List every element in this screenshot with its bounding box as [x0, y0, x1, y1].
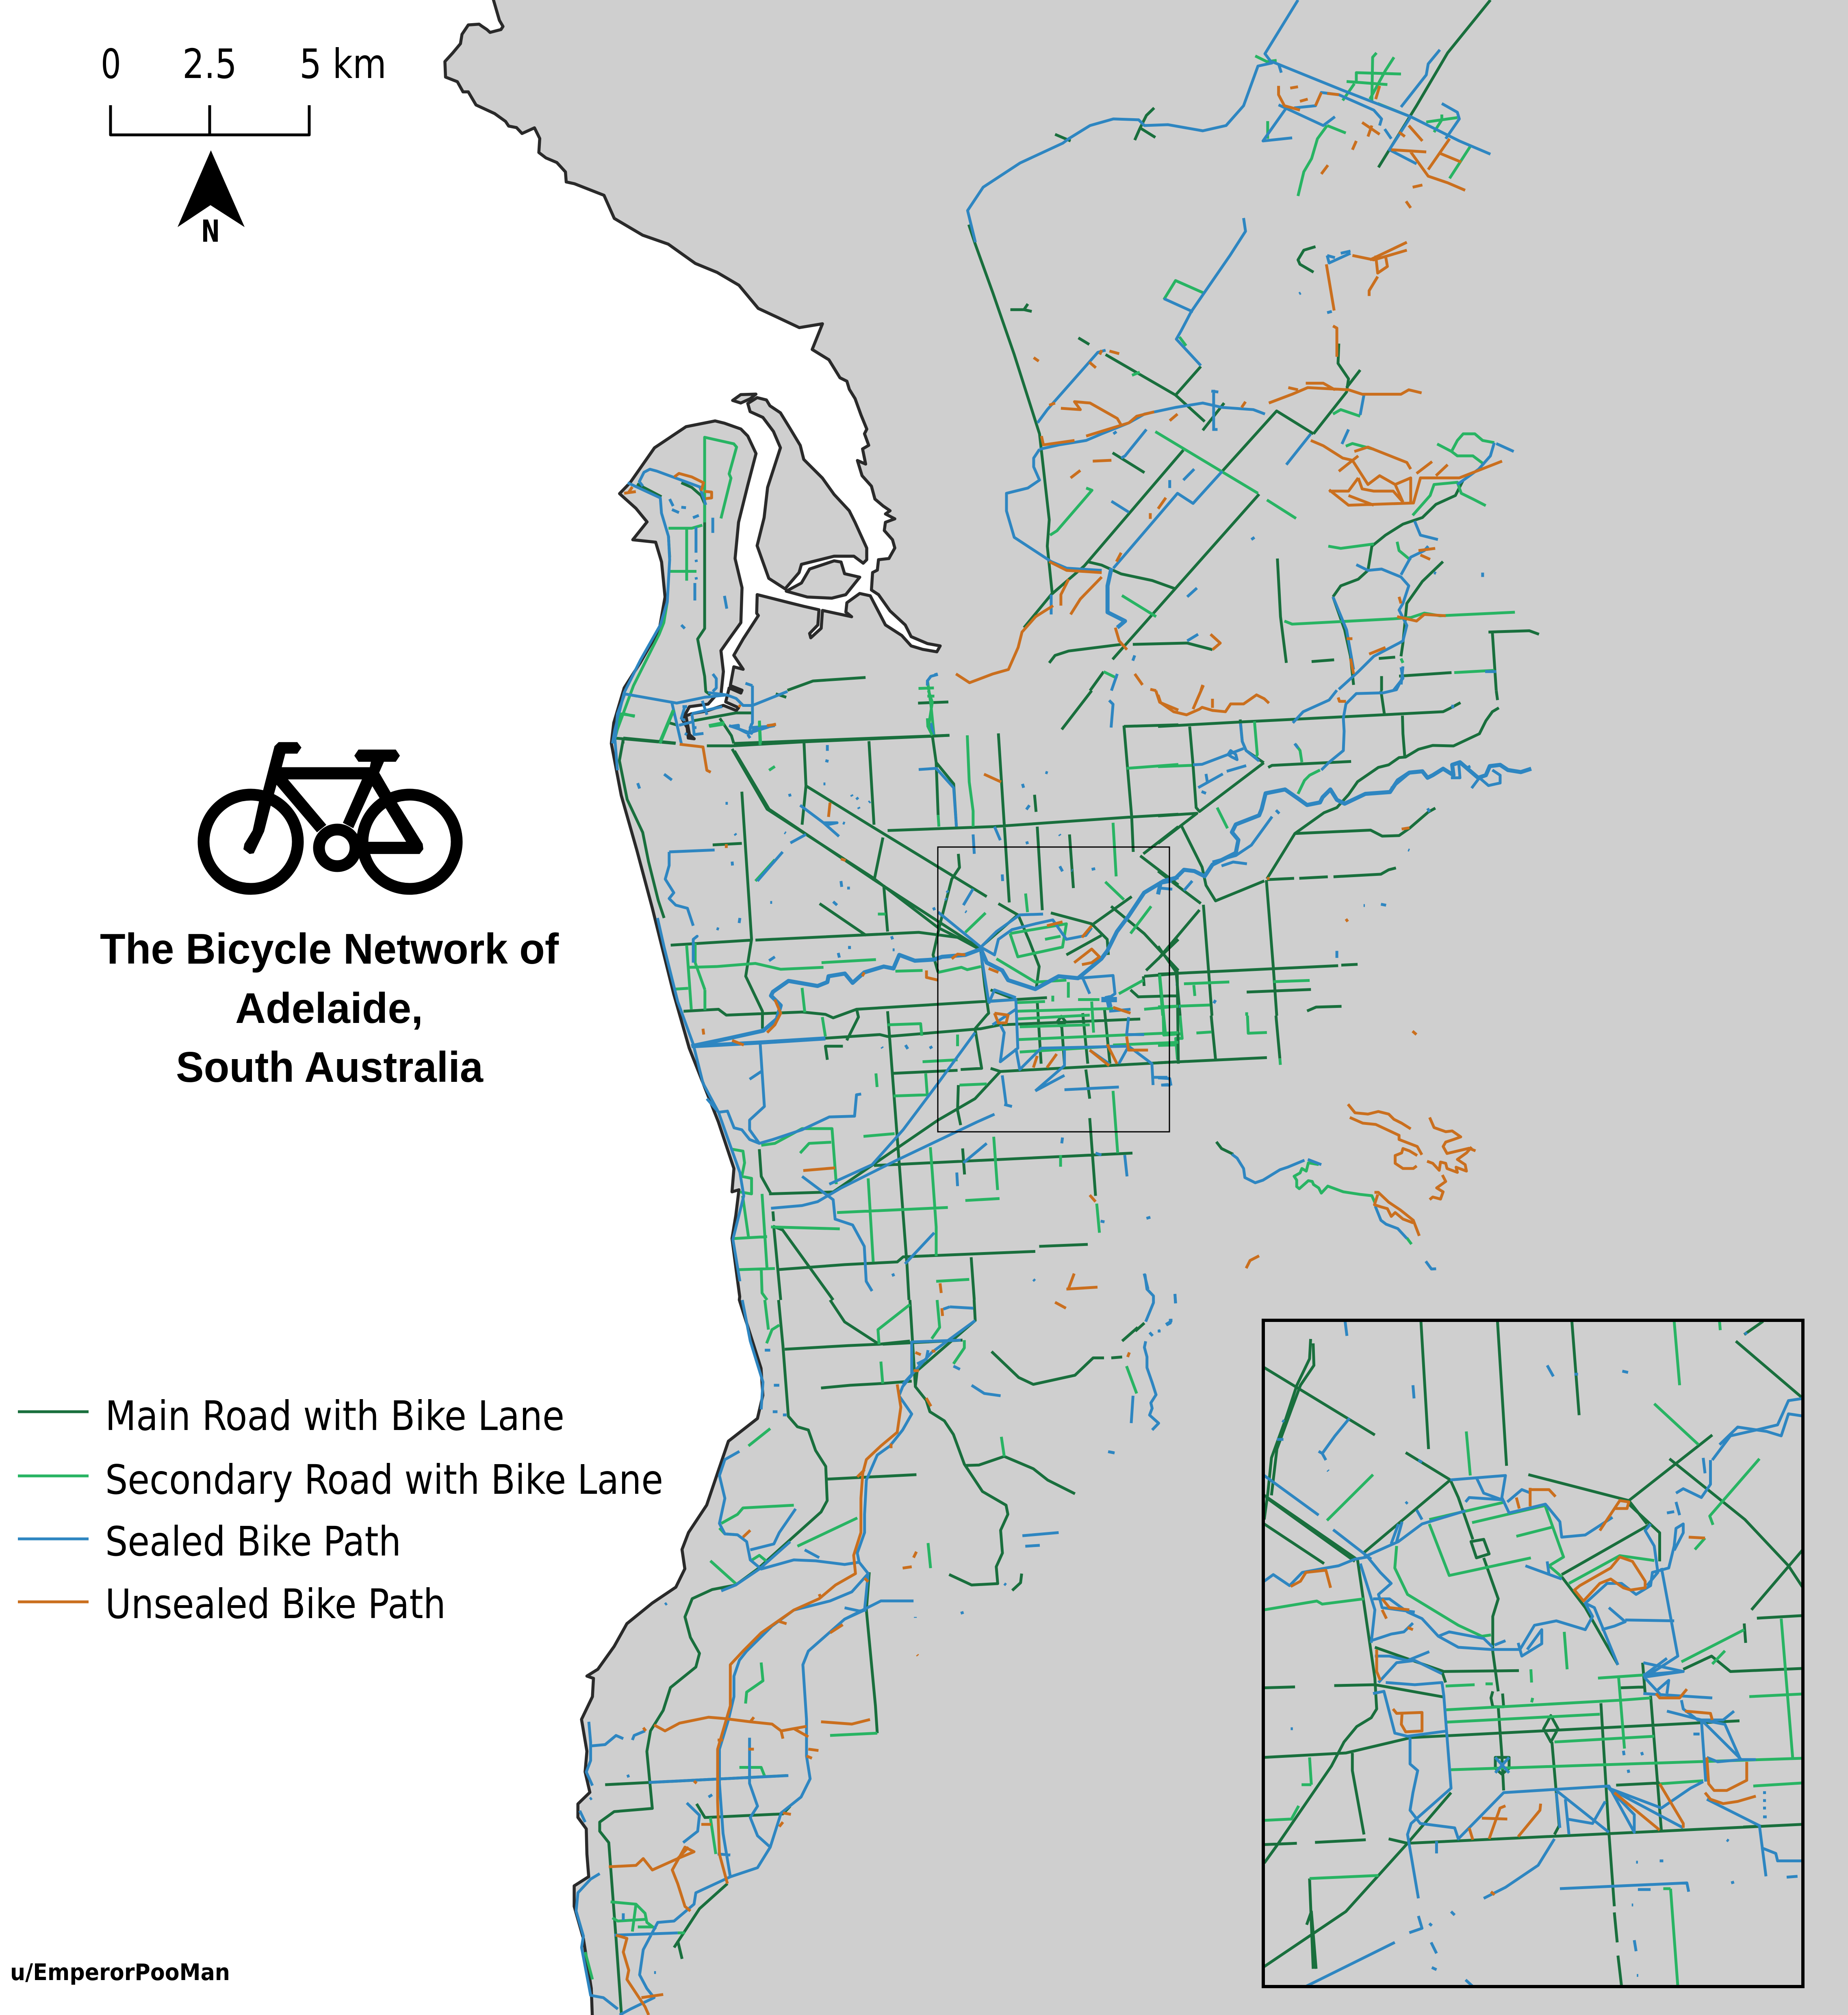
inset network	[1264, 1322, 1803, 1987]
river trail	[1158, 762, 1531, 895]
unsealed paths	[1158, 685, 1410, 922]
bicycle frame	[243, 742, 423, 854]
main roads	[969, 0, 1539, 691]
main road	[1135, 1323, 1144, 1331]
front wheel	[204, 795, 298, 889]
legend: main road: Main Road with Bike Lane	[105, 1392, 564, 1440]
secondary roads	[614, 437, 935, 743]
network tile: south-east foothills	[1158, 1016, 1475, 1331]
unsealed paths	[680, 691, 1178, 1293]
main roads	[600, 1300, 1138, 2015]
bicycle network map	[576, 0, 1539, 2015]
rear wheel	[362, 795, 457, 889]
secondary roads	[1050, 53, 1515, 678]
legend: sealed path: Sealed Bike Path	[105, 1518, 401, 1565]
secondary roads	[1158, 722, 1320, 1016]
unsealed paths	[609, 1302, 1130, 2015]
inset background	[1263, 1320, 1803, 1987]
legend: unsealed path: Unsealed Bike Path	[105, 1580, 446, 1628]
sealed paths	[1158, 1078, 1436, 1331]
network tile: eastern suburbs and river	[1158, 666, 1531, 1016]
main roads	[1158, 691, 1499, 1016]
sealed paths	[612, 469, 938, 743]
author credit: u/EmperorPooMan	[10, 1959, 230, 1986]
network tile: northern suburbs	[935, 0, 1539, 691]
arrow head	[178, 150, 245, 227]
main roads	[619, 691, 1178, 1300]
sealed paths	[1108, 1274, 1176, 1453]
scale bar ticks	[111, 105, 309, 135]
title line 1: The Bicycle Network of	[100, 925, 559, 973]
network tile: southern foothills strip	[1108, 1274, 1176, 1453]
network tile: central and western suburbs	[615, 691, 1178, 1300]
scale label 0: 0	[101, 40, 121, 88]
inset border	[1263, 1320, 1803, 1987]
network tile: southern suburbs	[576, 1300, 1138, 2015]
thick sealed path cluster	[1108, 568, 1125, 628]
icon: bicycle	[204, 742, 457, 889]
scale label 2.5: 2.5	[182, 40, 237, 88]
north letter: N	[201, 213, 220, 249]
title	[100, 925, 559, 1091]
harbour islands	[733, 394, 867, 598]
north arrow	[178, 150, 245, 249]
sealed paths	[935, 0, 1514, 691]
unsealed paths	[1246, 1031, 1475, 1268]
inset map of central Adelaide	[1263, 1320, 1803, 1987]
sealed paths	[615, 693, 1171, 1291]
legend	[18, 1392, 663, 1628]
river trail and coast links	[691, 877, 1178, 1046]
title line 2: Adelaide,	[235, 984, 423, 1032]
legend: secondary road: Secondary Road with Bike Lane	[105, 1456, 663, 1504]
inset sealed paths	[1264, 1322, 1803, 1987]
secondary roads	[1158, 1016, 1412, 1244]
land mass with coastline	[445, 0, 1848, 2015]
secondary roads	[585, 1300, 1137, 1979]
secondary roads	[616, 691, 1178, 1300]
inset extent rectangle	[938, 847, 1169, 1132]
inset secondary roads	[1264, 1322, 1803, 1987]
unsealed paths	[624, 473, 776, 726]
scale bar	[101, 40, 386, 135]
scale label 5 km: 5 km	[299, 40, 386, 88]
chainring	[319, 830, 356, 866]
main roads	[615, 483, 950, 743]
inset main roads	[1264, 1322, 1803, 1987]
network tile: north-west peninsula	[612, 437, 950, 743]
thick sealed block near the city east	[1102, 996, 1117, 1008]
sealed paths	[576, 1300, 1133, 2015]
main roads	[1158, 1016, 1280, 1154]
inset unsealed paths	[1291, 1488, 1756, 1895]
title line 3: South Australia	[176, 1043, 484, 1091]
unsealed paths	[956, 86, 1502, 691]
sealed paths	[1158, 666, 1500, 1007]
